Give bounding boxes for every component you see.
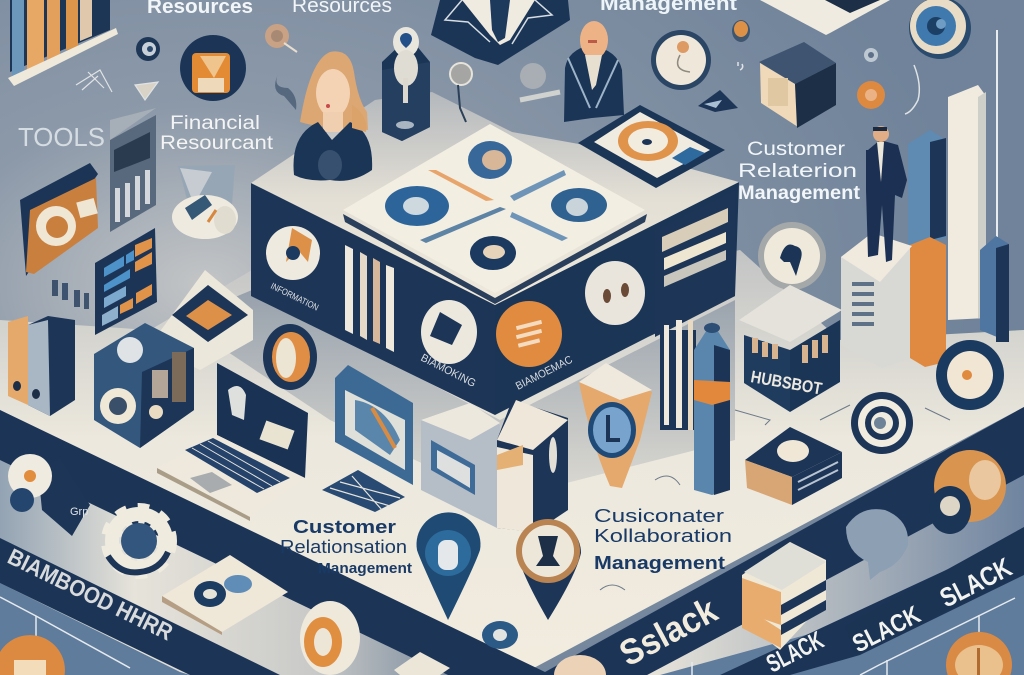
small lens left of man xyxy=(520,63,560,100)
bar: tall cream xyxy=(948,85,986,320)
small book on band bottom xyxy=(394,652,450,675)
label: financial resource xyxy=(160,113,274,154)
clock icon xyxy=(758,222,826,290)
icon circles on paper xyxy=(385,186,449,226)
peach blob at bottom xyxy=(554,655,606,675)
top surface xyxy=(251,92,739,305)
orange sphere with dark badge xyxy=(929,450,1006,534)
label: customer relationship management right: Customer xyxy=(747,139,846,160)
band text: bamboo hr: BIAMBOOD HHRR xyxy=(4,543,177,646)
map pin orange ring xyxy=(516,519,581,620)
flower gear icon: Grp xyxy=(70,506,88,518)
chart lines lower corners xyxy=(0,597,1015,675)
stacked striped box xyxy=(742,542,826,650)
label: customer relationship management left: Management xyxy=(318,560,412,577)
small orange dot top xyxy=(732,20,750,42)
person: suit top center xyxy=(431,0,570,65)
misc sketch icon xyxy=(76,70,158,100)
label: financial resource: Financial xyxy=(170,113,260,134)
hubspot text: HUBSBOT xyxy=(749,367,824,399)
orange coin xyxy=(857,81,885,109)
gear icon xyxy=(108,514,168,572)
icon: heart circle xyxy=(651,30,711,90)
right face cream circle xyxy=(585,261,645,325)
bar chart right xyxy=(908,30,1009,367)
target icon xyxy=(851,392,913,454)
central platform box xyxy=(251,92,739,415)
round target ring right xyxy=(936,340,1004,410)
left face xyxy=(251,183,495,415)
icon: swirl circle xyxy=(909,0,971,59)
square icon on floor xyxy=(150,270,253,370)
bar: blue xyxy=(908,130,946,248)
books icon left xyxy=(8,316,75,416)
label: customer collaboration management: Management xyxy=(594,553,725,573)
striped building left xyxy=(110,108,156,232)
person: standing man in suit xyxy=(866,126,907,262)
laptop top right xyxy=(760,0,890,35)
circle: bottom left orange badge xyxy=(0,635,65,675)
small key icon xyxy=(864,48,878,62)
document box left xyxy=(20,163,98,276)
bar: orange xyxy=(910,237,946,367)
left face text: INFORMATION xyxy=(269,281,320,313)
right face orange circle xyxy=(496,301,562,367)
laptop centre left xyxy=(157,363,308,521)
label: financial resource: Resourcant xyxy=(160,133,274,154)
label: customer relationship management left xyxy=(280,517,412,577)
right face stripes panel xyxy=(655,190,735,337)
circle: bottom right orange badge xyxy=(946,632,1012,675)
left face round icon xyxy=(421,300,477,364)
tablet target xyxy=(578,105,725,188)
bar: small blue xyxy=(980,236,1009,342)
small icon swoosh xyxy=(275,74,296,110)
gray speech bubble xyxy=(846,509,908,580)
gray striped label chips xyxy=(52,280,89,309)
bottle statue xyxy=(382,27,430,141)
label: customer relationship management right: Relaterion xyxy=(738,161,857,182)
right face xyxy=(495,182,739,415)
egg ring on band xyxy=(300,601,360,675)
floor platform xyxy=(0,250,1024,670)
label: customer relationship management left: Relationsation xyxy=(280,537,407,557)
orange pin icon xyxy=(579,363,652,488)
navy cream box lower centre xyxy=(497,400,568,532)
icon: financial badge xyxy=(180,35,246,101)
stripes column below box xyxy=(660,320,696,430)
books stack xyxy=(745,427,842,505)
notebook icon xyxy=(162,555,288,635)
left face stripes xyxy=(345,245,353,334)
map pin blue xyxy=(417,512,481,620)
band text: slack 1: SLACK xyxy=(848,601,925,658)
label: customer relationship management left: Customer xyxy=(293,517,396,537)
pedestal xyxy=(841,233,912,368)
small pin and stand xyxy=(450,63,472,122)
pens crossing xyxy=(428,170,494,201)
label: tools: TOOLS xyxy=(18,122,105,152)
person: woman bust xyxy=(294,51,372,181)
keyboard mat xyxy=(322,470,405,512)
box with speaker xyxy=(94,323,194,448)
left face lower text: BIAMOKING xyxy=(419,352,478,390)
small sketch mark xyxy=(738,62,919,114)
cube icon xyxy=(759,42,836,128)
label: customer collaboration management: Cusiconater xyxy=(594,506,724,526)
lower strips and bands xyxy=(0,407,1024,675)
flower gear icon xyxy=(8,454,90,536)
label: customer relationship management right xyxy=(738,139,861,204)
bookshelf chart top left xyxy=(8,0,118,86)
label: customer collaboration management xyxy=(594,506,732,573)
tablet with blue and orange tiles xyxy=(95,228,157,335)
gray box lower centre xyxy=(421,403,500,528)
small icon peach xyxy=(265,24,297,52)
glass bag object xyxy=(172,165,238,239)
ring icon under box xyxy=(263,324,317,390)
person: bald man xyxy=(564,21,624,122)
pen column xyxy=(694,322,730,495)
hubspot box xyxy=(739,285,842,412)
band text: slack script: Sslack xyxy=(613,589,724,674)
small icon ring xyxy=(136,37,160,61)
small dark flag xyxy=(698,90,738,112)
small ring floor xyxy=(482,621,518,649)
label: customer relationship management right: Management xyxy=(738,183,861,204)
left face circle xyxy=(266,226,320,280)
paper on top xyxy=(343,124,647,304)
right face text: BIAMOEMAC xyxy=(514,354,575,393)
label: customer collaboration management: Kollaboration xyxy=(594,526,732,546)
vertical line xyxy=(996,30,998,237)
small doodle strokes on floor xyxy=(600,405,950,590)
blue box with icon xyxy=(335,365,413,485)
